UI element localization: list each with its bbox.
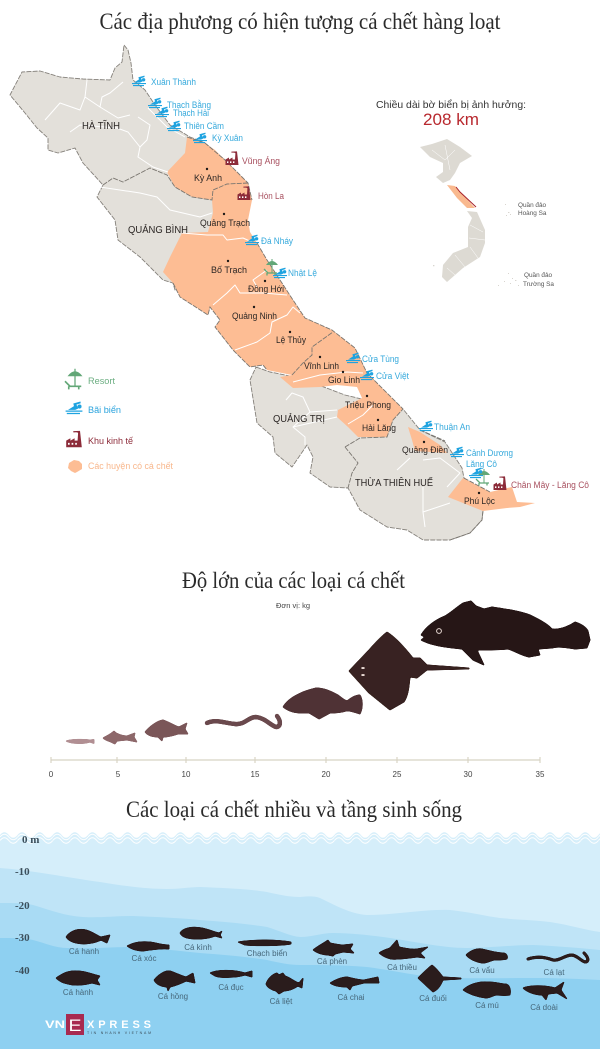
species: Cá thiều — [379, 940, 428, 972]
species: Cá đuối — [418, 965, 461, 1003]
economic zone markers: Chân Mây - Lăng Cô — [511, 480, 589, 490]
district labels and dots: Quảng Trạch — [200, 218, 250, 228]
district labels and dots: Gio Linh — [328, 375, 360, 385]
logo: VnExpress: TIN NHANH VIETNAM — [87, 1031, 151, 1035]
legend — [65, 369, 173, 473]
legend item: beach: Bãi biển — [88, 405, 121, 415]
province labels: QUẢNG TRỊ — [273, 412, 325, 425]
inset labels: Trường Sa — [523, 281, 554, 288]
inset labels: Quần đảo — [518, 200, 547, 209]
region: affected districts, Kỳ Anh to Hải Lăng — [163, 137, 403, 437]
species: Cá lạt: Cá lạt — [544, 968, 565, 977]
depth labels: -40 — [15, 965, 30, 977]
map: central Vietnam provinces — [10, 45, 589, 540]
species: Cá liệt: Cá liệt — [270, 997, 293, 1006]
axis: 10 — [182, 770, 191, 779]
axis: 15 — [251, 770, 260, 779]
species: Cá phèn — [313, 940, 354, 966]
economic zone markers — [226, 151, 589, 490]
species: Cá đục: Cá đục — [218, 983, 244, 992]
callout value: 208 km — [423, 110, 479, 129]
economic zone markers: Hòn La — [258, 191, 284, 201]
species: Cá kình — [180, 927, 222, 952]
logo: VnExpress — [45, 1014, 151, 1035]
species: Cá phèn: Cá phèn — [317, 957, 347, 966]
title: map section: Các địa phương có hiện tượng cá chết hàng loạt — [100, 9, 501, 34]
species: Chạch biển — [238, 940, 291, 958]
species: Cá lạt — [528, 953, 588, 977]
chart: fish weight scale — [49, 601, 590, 779]
species: Cá hanh: Cá hanh — [69, 947, 99, 956]
district labels and dots: Lệ Thủy — [276, 335, 306, 345]
region: Phú Lộc — [448, 478, 535, 511]
fish 1 — [66, 739, 94, 744]
species: Cá kình: Cá kình — [184, 943, 212, 952]
species: Cá liệt — [266, 973, 303, 1006]
fish 2 — [103, 731, 137, 744]
fish 7: largest — [421, 601, 590, 665]
axis: 5 — [116, 770, 121, 779]
district labels and dots: Kỳ Anh — [194, 173, 222, 183]
axis: 20 — [322, 770, 331, 779]
legend item: resort: Resort — [88, 376, 116, 386]
legend item: economic zone: Khu kinh tế — [88, 436, 133, 446]
beach markers: Nhật Lệ — [288, 268, 317, 278]
beach markers: Xuân Thành — [151, 77, 196, 87]
panel: sea depth layers — [0, 831, 600, 1049]
district labels and dots: Đồng Hới — [248, 284, 284, 294]
species: Cá doài — [523, 982, 567, 1012]
beach markers: Thạch Hải — [173, 108, 209, 118]
species: Cá xóc: Cá xóc — [132, 954, 156, 963]
province labels — [82, 119, 433, 489]
district labels and dots: Quảng Ninh — [232, 311, 277, 321]
species: Cá vẩu: Cá vẩu — [469, 966, 495, 975]
fish 4: eel — [207, 716, 280, 727]
axis: 30 — [464, 770, 473, 779]
title: fish species and depth: Các loại cá chết nhiều và tầng sinh sống — [126, 797, 462, 822]
logo: VnExpress: VN — [45, 1019, 65, 1031]
resort icons — [264, 259, 490, 486]
beach markers: Đá Nháy — [261, 236, 293, 246]
district labels and dots: Hải Lăng — [362, 423, 396, 433]
title: fish size: Độ lớn của các loại cá chết — [182, 568, 406, 593]
species: Cá mú: Cá mú — [475, 1001, 499, 1010]
axis: 25 — [393, 770, 402, 779]
depth labels — [15, 834, 39, 977]
depth labels: -10 — [15, 866, 30, 878]
province labels: THỪA THIÊN HUẾ — [355, 476, 433, 489]
species: Cá hanh — [66, 929, 110, 956]
species: Cá vẩu — [466, 949, 507, 975]
region: Quảng Trị and Thừa Thiên Huế — [250, 367, 483, 540]
species: Cá xóc — [127, 942, 169, 963]
province labels: HÀ TĨNH — [82, 119, 120, 132]
beach markers: Thuận An — [434, 422, 470, 432]
species: Cá hồng — [154, 971, 195, 1001]
fish 6: ray — [349, 632, 469, 710]
beach markers: Kỳ Xuân — [212, 133, 243, 143]
species: Cá chai — [330, 977, 379, 1002]
beach markers: Thạch Bằng — [167, 100, 211, 110]
species: Cá thiều: Cá thiều — [387, 963, 417, 972]
district labels and dots — [194, 168, 495, 506]
species: Cá đuối: Cá đuối — [419, 994, 447, 1003]
species: Cá hành: Cá hành — [63, 988, 93, 997]
beach markers: Thiên Cầm — [184, 121, 224, 131]
logo: VnExpress: E — [68, 1016, 82, 1035]
species: Cá chai: Cá chai — [337, 993, 365, 1002]
callout: affected coastline — [376, 99, 526, 129]
province labels: QUẢNG BÌNH — [128, 223, 188, 236]
region: Quảng Điền — [408, 427, 447, 453]
species: Cá hành — [56, 971, 100, 997]
species: Cá doài: Cá doài — [530, 1003, 558, 1012]
axis: 35 — [536, 770, 545, 779]
beach markers: Cửa Tùng — [362, 354, 399, 364]
economic zone markers: Vũng Áng — [242, 156, 280, 166]
axis: 0 — [49, 770, 54, 779]
callout label: Chiều dài bờ biển bị ảnh hưởng: — [376, 99, 526, 111]
district labels and dots: Quảng Điền — [402, 445, 448, 455]
beach markers: Lăng Cô — [466, 459, 497, 469]
axis — [49, 757, 545, 779]
region: Hà Tĩnh and Quảng Bình — [10, 45, 240, 290]
unit note: Đơn vị: kg — [276, 601, 310, 610]
legend item: affected districts: Các huyện có cá chết — [88, 461, 173, 471]
inset map: Vietnam — [420, 139, 554, 288]
district labels and dots: Bố Trạch — [211, 265, 247, 275]
fish 3 — [145, 720, 188, 741]
inset labels: Hoàng Sa — [518, 210, 547, 217]
inset labels — [518, 200, 554, 288]
species: Cá đục — [210, 970, 252, 992]
species: Cá mú — [463, 982, 510, 1010]
depth labels: -30 — [15, 932, 30, 944]
beach markers — [132, 76, 513, 478]
species: Cá hồng: Cá hồng — [158, 992, 188, 1001]
depth labels: -20 — [15, 900, 30, 912]
beach markers: Cảnh Dương — [466, 448, 513, 458]
species: Chạch biển: Chạch biển — [247, 949, 287, 958]
district labels and dots: Triệu Phong — [345, 400, 391, 410]
fish 5 — [283, 688, 362, 719]
district labels and dots: Vĩnh Linh — [304, 361, 339, 371]
inset labels: Quần đảo — [524, 270, 553, 279]
beach markers: Cửa Việt — [376, 371, 409, 381]
logo: VnExpress: XPRESS — [87, 1019, 151, 1031]
district labels and dots: Phú Lộc — [464, 496, 495, 506]
depth labels: 0 m — [22, 834, 39, 846]
